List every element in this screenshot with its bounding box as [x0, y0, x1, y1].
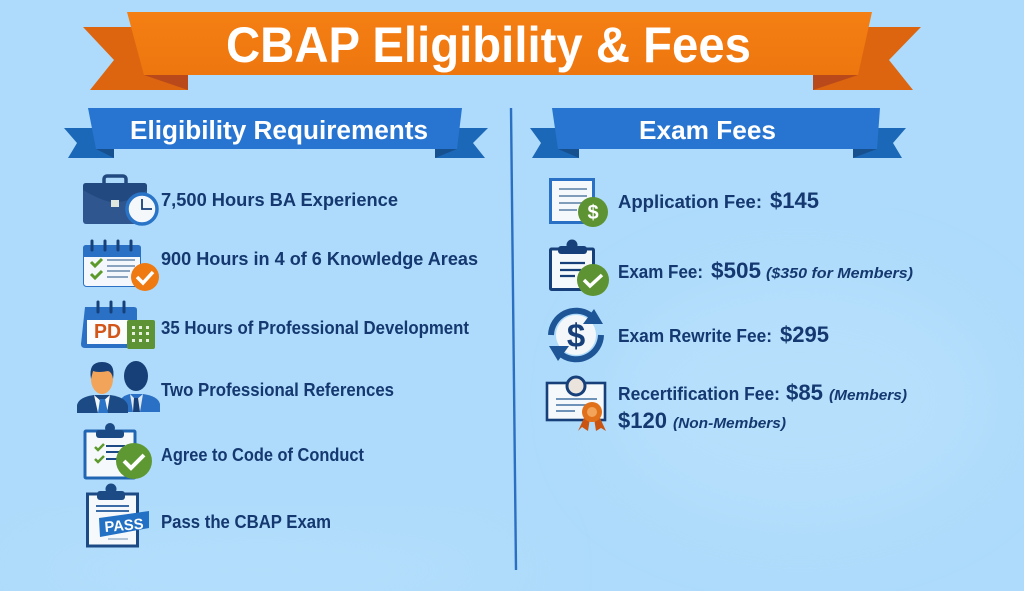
item: BA experience: 7,500 Hours BA Experience: [161, 190, 398, 210]
item: pass the exam: Pass the CBAP Exam: [161, 512, 331, 532]
item: references: Two Professional References: [161, 380, 394, 400]
icon: circular arrows with dollar: [549, 309, 603, 361]
item: recertification fee: $85: [786, 380, 823, 405]
icon: circular arrows with dollar: $: [567, 317, 585, 354]
icon: PD calendar: PD: [94, 321, 121, 343]
panel: exam fees: [547, 180, 913, 433]
item: code of conduct: [85, 423, 364, 479]
heading: eligibility requirements: Eligibility Requirements: [130, 117, 428, 145]
icon: clipboard with check: [550, 240, 609, 296]
title banner: [83, 12, 921, 90]
item: exam fee: $505: [711, 258, 761, 283]
icon: certificate with ribbon: [547, 377, 606, 431]
item: exam fee: Exam Fee:: [618, 262, 703, 282]
item: rewrite fee: $295: [780, 322, 829, 347]
item: rewrite fee: [549, 309, 829, 361]
item: application fee: [550, 180, 819, 227]
item: professional development: 35 Hours of Professional Development: [161, 318, 469, 338]
icon: document with dollar: $: [587, 202, 599, 224]
icon: clipboard with PASS banner: [88, 484, 149, 546]
item: exam fee: [550, 240, 913, 296]
item: knowledge areas: [83, 241, 478, 291]
item: BA experience: [83, 176, 398, 224]
item: pass the exam: [88, 484, 331, 546]
item: references: [77, 361, 394, 413]
item: professional development: [81, 302, 469, 349]
item: recertification fee: (Non-Members): [673, 416, 786, 432]
icon: clipboard with green check: [85, 423, 152, 479]
heading: exam fees: Exam Fees: [639, 115, 776, 145]
item: knowledge areas: 900 Hours in 4 of 6 Knowledge Areas: [161, 249, 478, 269]
section banner: eligibility requirements: [64, 108, 488, 158]
item: exam fee: ($350 for Members): [766, 266, 913, 282]
item: rewrite fee: Exam Rewrite Fee:: [618, 326, 772, 346]
icon: calendar with orange check: [83, 241, 159, 291]
panel: eligibility requirements: [77, 176, 478, 546]
item: recertification fee: (Members): [829, 388, 907, 404]
column divider: [511, 108, 516, 570]
icon: PD calendar: [81, 302, 155, 349]
item: recertification fee: [547, 377, 907, 433]
item: application fee: Application Fee:: [618, 192, 762, 212]
icon: briefcase with clock: [83, 176, 157, 224]
item: code of conduct: Agree to Code of Conduct: [161, 445, 364, 465]
icon: clipboard with PASS banner: PASS: [104, 516, 144, 536]
item: application fee: $145: [770, 188, 819, 213]
icon: two business people: [77, 361, 160, 413]
section banner: exam fees: [530, 108, 906, 158]
title: CBAP Eligibility & Fees: [226, 17, 751, 73]
icon: document with dollar: [550, 180, 608, 227]
item: recertification fee: Recertification Fee:: [618, 384, 780, 404]
item: recertification fee: $120: [618, 408, 667, 433]
